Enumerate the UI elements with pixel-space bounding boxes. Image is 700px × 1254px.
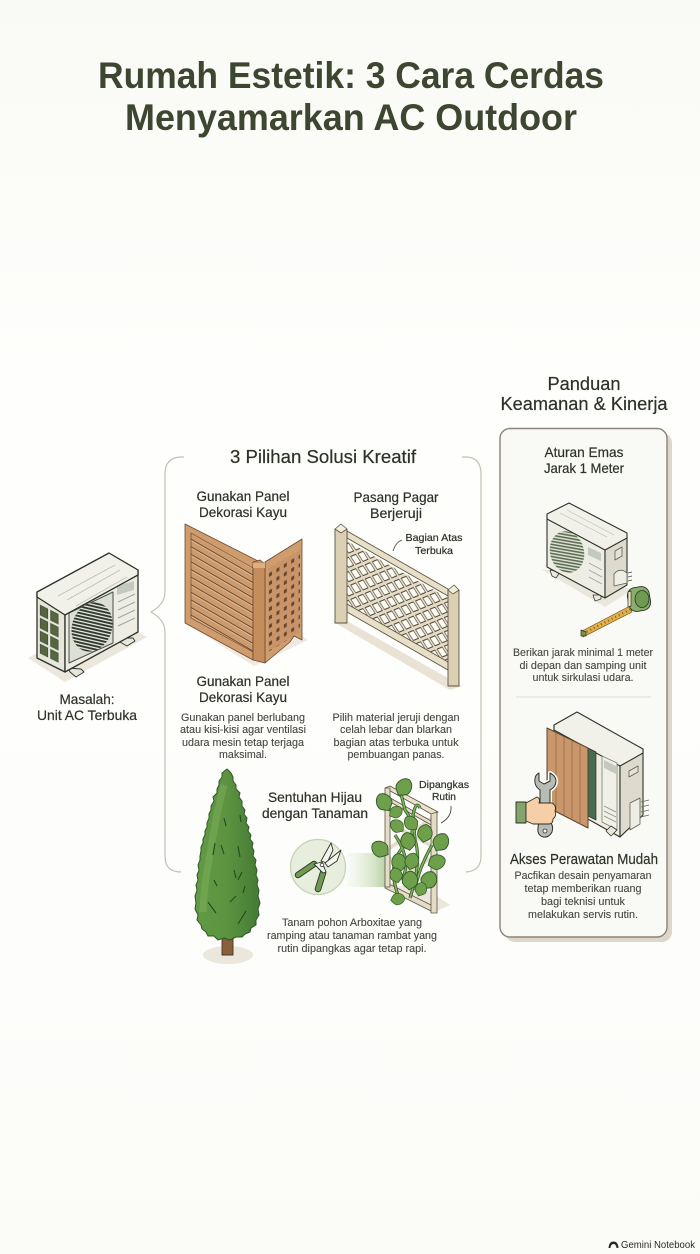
text: greenery description [267, 917, 437, 955]
solution 3: greenery [195, 769, 469, 964]
title: Menyamarkan AC Outdoor [125, 97, 577, 138]
text: fence description: bagian atas terbuka untuk [334, 737, 459, 749]
heading: one meter rule: Aturan Emas [544, 444, 624, 460]
text: greenery description: ramping atau tanaman rambat yang [267, 930, 437, 942]
heading: greenery: dengan Tanaman [262, 805, 368, 821]
text: wooden panel description: Gunakan panel berlubang [181, 712, 305, 724]
connector gradient [347, 853, 385, 887]
text: maintenance description: Pacfikan desain penyamaran [514, 870, 652, 882]
icon: arborvitae tree [195, 769, 260, 964]
subheading: wooden panel [196, 673, 290, 705]
solution 1: wooden panel [180, 488, 308, 761]
heading: safety guide: Keamanan & Kinerja [500, 394, 668, 414]
heading: wooden panel: Dekorasi Kayu [199, 504, 287, 520]
text: greenery description: rutin dipangkas agar tetap rapi. [278, 943, 426, 955]
title: Rumah Estetik: 3 Cara Cerdas [98, 55, 604, 96]
callout: prune regularly [419, 779, 469, 823]
problem: exposed AC unit [28, 553, 147, 723]
icon: outdoor AC unit [28, 553, 147, 682]
text: fence description: celah lebar dan blarkan [340, 724, 452, 736]
text: greenery description: Tanam pohon Arboxitae yang [282, 917, 422, 929]
text: wooden panel description: atau kisi-kisi agar ventilasi [180, 724, 306, 736]
icon: AC unit behind opened panel with wrench [516, 712, 649, 837]
text: fence description: Pilih material jeruji dengan [332, 712, 460, 724]
heading: easy maintenance: Akses Perawatan Mudah [510, 851, 658, 868]
watermark: Gemini Notebook: Gemini Notebook [621, 1240, 696, 1251]
icon: wooden panel screen [185, 524, 308, 666]
heading: lattice fence: Pasang Pagar [354, 489, 439, 505]
heading: greenery [262, 789, 368, 821]
icon: lattice fence [332, 524, 462, 690]
text: maintenance description [514, 870, 652, 921]
heading: lattice fence [354, 489, 439, 521]
heading: one meter rule: Jarak 1 Meter [544, 460, 624, 476]
label: problem: Unit AC Terbuka [37, 707, 137, 723]
label: problem [37, 691, 137, 723]
heading: solutions: 3 Pilihan Solusi Kreatif [230, 447, 417, 467]
text: maintenance description: melakukan servis rutin. [528, 909, 638, 921]
text: one meter rule description [513, 647, 653, 684]
label: problem: Masalah: [60, 691, 114, 707]
icon: AC unit with tape measure [541, 503, 652, 637]
heading: wooden panel [196, 488, 290, 520]
panel card [500, 428, 672, 942]
heading: greenery: Sentuhan Hijau [268, 789, 362, 805]
title [98, 55, 604, 138]
text: maintenance description: bagi teknisi untuk [541, 896, 625, 908]
icon: vine trellis [368, 775, 452, 913]
callout: open top: Bagian Atas [406, 532, 462, 544]
text: wooden panel description: maksimal. [219, 749, 267, 761]
heading: safety guide: Panduan [548, 374, 620, 394]
text: maintenance description: tetap memberikan ruang [524, 883, 642, 895]
panel: safety and performance [500, 428, 672, 942]
heading: safety guide [500, 374, 668, 414]
text: wooden panel description: udara mesin tetap terjaga [182, 737, 305, 749]
callout: open top [393, 532, 462, 557]
subheading: wooden panel: Dekorasi Kayu [199, 689, 287, 705]
heading: lattice fence: Berjeruji [370, 505, 422, 521]
text: one meter rule description: di depan dan samping unit [520, 660, 646, 672]
text: wooden panel description [180, 712, 306, 761]
text: one meter rule description: untuk sirkulasi udara. [532, 672, 634, 684]
text: fence description [332, 712, 460, 761]
solution 2: lattice fence [332, 489, 462, 761]
subheading: wooden panel: Gunakan Panel [196, 673, 290, 689]
bracket grouping the solutions [151, 457, 481, 872]
icon: pruning shears [290, 840, 346, 894]
callout: prune regularly: Dipangkas [419, 779, 469, 791]
heading: wooden panel: Gunakan Panel [196, 488, 290, 504]
text: fence description: pembuangan panas. [348, 749, 444, 761]
heading: one meter rule [544, 444, 624, 476]
text: one meter rule description: Berikan jarak minimal 1 meter [513, 647, 653, 659]
callout: prune regularly: Rutin [432, 791, 456, 803]
callout: open top: Terbuka [415, 545, 453, 557]
